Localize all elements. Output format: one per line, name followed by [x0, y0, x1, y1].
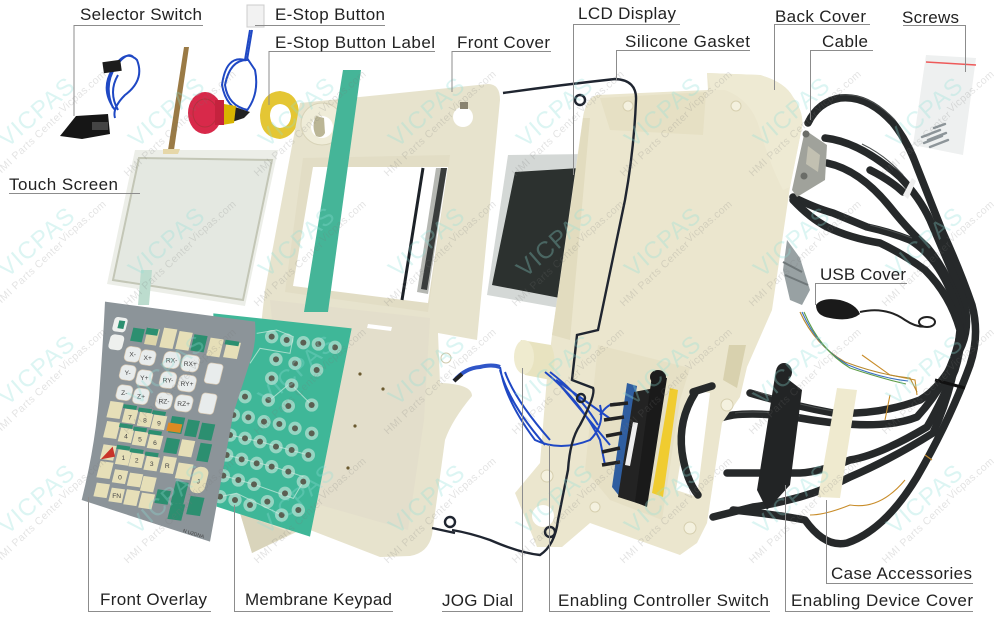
key numbers: 4 [124, 433, 128, 440]
watermark: HMI Parts Center [382, 108, 456, 179]
label: Cable: Cable [822, 32, 868, 51]
watermark: Vicpas.com [812, 198, 864, 245]
watermark: VICPAS [253, 72, 341, 153]
watermark: VICPAS [748, 459, 836, 540]
screws [922, 124, 948, 147]
label: Case Accessories [826, 500, 973, 584]
watermark: VICPAS [123, 202, 211, 283]
watermark: HMI Parts Center [880, 238, 954, 309]
watermark: Vicpas.com [187, 68, 239, 115]
jog key text: RX+ [184, 361, 197, 368]
watermark: HMI Parts Center [252, 108, 326, 179]
watermark: HMI Parts Center [747, 495, 821, 566]
D-sub connector [792, 130, 827, 197]
case accessories part [818, 388, 857, 498]
label: Enabling Device Cover [786, 485, 973, 612]
watermark: Vicpas.com [447, 68, 499, 115]
watermark: VICPAS [123, 459, 211, 540]
watermark: HMI Parts Center [382, 495, 456, 566]
touch screen [107, 149, 278, 306]
cable tie [935, 380, 965, 388]
multicolour wires [800, 312, 917, 392]
label: Front Cover [452, 33, 551, 92]
watermark: VICPAS [748, 202, 836, 283]
watermark: Vicpas.com [945, 326, 997, 373]
cable bundle [679, 95, 976, 544]
label: Selector Switch [74, 5, 203, 116]
label: Membrane Keypad [234, 505, 393, 612]
watermark: HMI Parts Center [510, 495, 584, 566]
watermark: Vicpas.com [945, 455, 997, 502]
key numbers: 2 [135, 458, 139, 465]
watermark: HMI Parts Center [122, 495, 196, 566]
key numbers: 5 [138, 437, 142, 444]
watermark: Vicpas.com [812, 68, 864, 115]
label: USB Cover [816, 265, 907, 305]
watermark: HMI Parts Center [618, 366, 692, 437]
screw bosses [541, 101, 741, 534]
jog key text: RY- [163, 378, 173, 385]
numeric keys [93, 401, 210, 509]
front overlay [82, 302, 255, 542]
e-stop button label [260, 91, 299, 139]
jog key text: Z+ [137, 394, 145, 401]
watermark: Vicpas.com [683, 326, 735, 373]
watermark: Vicpas.com [317, 198, 369, 245]
jog keys [115, 346, 224, 415]
watermark: HMI Parts Center [252, 495, 326, 566]
watermark: HMI Parts Center [122, 366, 196, 437]
watermark: HMI Parts Center [510, 108, 584, 179]
LCD display [487, 154, 590, 310]
watermark: VICPAS [748, 72, 836, 153]
watermark: Vicpas.com [945, 198, 997, 245]
label: Front Overlay [88, 497, 211, 612]
watermark: VICPAS [383, 72, 471, 153]
label: Silicone Gasket [616, 32, 750, 80]
watermark: Vicpas.com [575, 455, 627, 502]
watermark: VICPAS [881, 202, 969, 283]
watermark: Vicpas.com [812, 455, 864, 502]
watermark: HMI Parts Center [747, 238, 821, 309]
watermark: Vicpas.com [317, 326, 369, 373]
jog key text: RZ- [158, 399, 170, 406]
gasket rings [445, 95, 585, 537]
watermark: Vicpas.com [812, 326, 864, 373]
label: USB Cover: USB Cover [820, 265, 906, 284]
watermark: Vicpas.com [187, 326, 239, 373]
watermark: HMI Parts Center [618, 108, 692, 179]
watermark: HMI Parts Center [382, 238, 456, 309]
watermark: VICPAS [383, 330, 471, 411]
silicone gasket [432, 79, 636, 555]
watermark: VICPAS [619, 72, 707, 153]
key numbers: 9 [157, 420, 161, 427]
e-stop button [188, 5, 264, 134]
cable tip [903, 178, 916, 199]
top keys [108, 317, 241, 359]
watermark: HMI Parts Center [747, 366, 821, 437]
label: Selector Switch: Selector Switch [80, 5, 202, 24]
orange key [166, 422, 182, 433]
USB cover [800, 299, 935, 392]
label: Enabling Device Cover: Enabling Device Cover [791, 591, 973, 610]
watermark: Vicpas.com [447, 455, 499, 502]
green header keys [116, 404, 215, 521]
touch screen ribbon [168, 47, 189, 150]
label: Front Overlay: Front Overlay [100, 590, 208, 609]
jog key text: RX- [166, 358, 177, 365]
blue wires [454, 366, 620, 465]
warning triangle [101, 447, 115, 459]
label: Cable [810, 32, 873, 120]
watermark: HMI Parts Center [382, 366, 456, 437]
key numbers: 7 [128, 414, 132, 421]
label: LCD Display [574, 4, 680, 175]
watermark: Vicpas.com [317, 68, 369, 115]
watermark: HMI Parts Center [252, 366, 326, 437]
e-stop opening [301, 103, 343, 145]
watermark: HMI Parts Center [510, 238, 584, 309]
watermark: Vicpas.com [447, 198, 499, 245]
JOG dial [514, 340, 554, 380]
jog key text [121, 352, 197, 408]
key numbers: J [197, 478, 200, 485]
keypad dots [213, 330, 342, 522]
key numbers: 0 [118, 474, 122, 481]
watermark: Vicpas.com [683, 68, 735, 115]
lower slot [367, 324, 392, 331]
watermark: HMI Parts Center [122, 108, 196, 179]
screws bag [913, 55, 976, 155]
watermark: VICPAS [383, 202, 471, 283]
model number: N U2DNA [182, 528, 205, 540]
key numbers: R [165, 463, 170, 470]
jog key text: X+ [144, 355, 152, 362]
jog key text: Y- [125, 370, 131, 377]
watermark: Vicpas.com [447, 326, 499, 373]
watermark: Vicpas.com [683, 455, 735, 502]
watermark: VICPAS [123, 72, 211, 153]
watermark: VICPAS [253, 202, 341, 283]
label: Enabling Controller Switch: Enabling Controller Switch [558, 591, 769, 610]
keypad traces [220, 330, 312, 515]
watermark: HMI Parts Center [880, 495, 954, 566]
enabling device cover [757, 363, 802, 510]
label: LCD Display: LCD Display [578, 4, 676, 23]
watermark: HMI Parts Center [880, 108, 954, 179]
watermark: HMI Parts Center [122, 238, 196, 309]
membrane keypad [213, 313, 352, 537]
label: Screws: Screws [902, 8, 959, 27]
label: Touch Screen: Touch Screen [9, 175, 118, 194]
enabling controller switch [602, 370, 678, 507]
watermark: VICPAS [511, 330, 599, 411]
watermark: VICPAS [881, 459, 969, 540]
selector switch [60, 55, 139, 139]
watermark: VICPAS [383, 459, 471, 540]
watermark: Vicpas.com [57, 198, 109, 245]
watermark: Vicpas.com [57, 455, 109, 502]
label: JOG Dial [442, 368, 522, 612]
front cover [240, 84, 500, 557]
label: Case Accessories: Case Accessories [831, 564, 972, 583]
watermark: VICPAS [253, 330, 341, 411]
key numbers: FN [112, 493, 121, 500]
watermark: VICPAS [881, 72, 969, 153]
watermark: VICPAS [511, 72, 599, 153]
key numbers: 6 [153, 440, 157, 447]
label: Front Cover: Front Cover [457, 33, 550, 52]
watermark: Vicpas.com [683, 198, 735, 245]
key numbers: 3 [150, 461, 154, 468]
watermark: VICPAS [511, 459, 599, 540]
watermark: VICPAS [123, 330, 211, 411]
watermark: Vicpas.com [575, 68, 627, 115]
label: Screws [902, 8, 966, 72]
watermark: VICPAS [511, 202, 599, 283]
label: Enabling Controller Switch [550, 445, 770, 612]
jog key text: Y+ [140, 375, 149, 382]
watermark: Vicpas.com [187, 455, 239, 502]
back cover [515, 73, 802, 555]
watermark: Vicpas.com [575, 198, 627, 245]
watermark: Vicpas.com [945, 68, 997, 115]
watermark: VICPAS [619, 330, 707, 411]
watermark: Vicpas.com [575, 326, 627, 373]
lower triangle [240, 513, 292, 553]
watermark: Vicpas.com [57, 68, 109, 115]
display window [293, 167, 448, 303]
watermark: HMI Parts Center [747, 108, 821, 179]
watermark: VICPAS [619, 202, 707, 283]
label: Back Cover: Back Cover [775, 7, 866, 26]
watermark: HMI Parts Center [880, 366, 954, 437]
watermark: Vicpas.com [57, 326, 109, 373]
label: JOG Dial: JOG Dial [442, 591, 513, 610]
key numbers: 8 [143, 418, 147, 425]
watermark: VICPAS [881, 330, 969, 411]
key numbers: 1 [121, 455, 125, 462]
key numbers [112, 414, 200, 500]
label: E-Stop Button: E-Stop Button [275, 5, 385, 24]
label: E-Stop Button Label: E-Stop Button Label [275, 33, 435, 52]
jog key text: RZ+ [177, 401, 190, 408]
watermark: VICPAS [253, 459, 341, 540]
label: E-Stop Button Label [269, 33, 435, 105]
label: Membrane Keypad: Membrane Keypad [245, 590, 392, 609]
cable gland [783, 240, 810, 305]
watermark: Vicpas.com [317, 455, 369, 502]
watermark: HMI Parts Center [618, 495, 692, 566]
watermark: Vicpas.com [187, 198, 239, 245]
label: Silicone Gasket: Silicone Gasket [625, 32, 750, 51]
watermark: HMI Parts Center [252, 238, 326, 309]
watermark: VICPAS [748, 330, 836, 411]
watermark: HMI Parts Center [618, 238, 692, 309]
membrane tail [304, 70, 361, 312]
jog key text: Z- [121, 390, 127, 397]
label: Back Cover [774, 7, 870, 90]
jog key text: X- [129, 352, 136, 359]
screw hole [453, 107, 473, 127]
watermark: VICPAS [619, 459, 707, 540]
watermark: HMI Parts Center [510, 366, 584, 437]
jog key text: RY+ [180, 381, 194, 388]
cut-out window [676, 390, 710, 497]
